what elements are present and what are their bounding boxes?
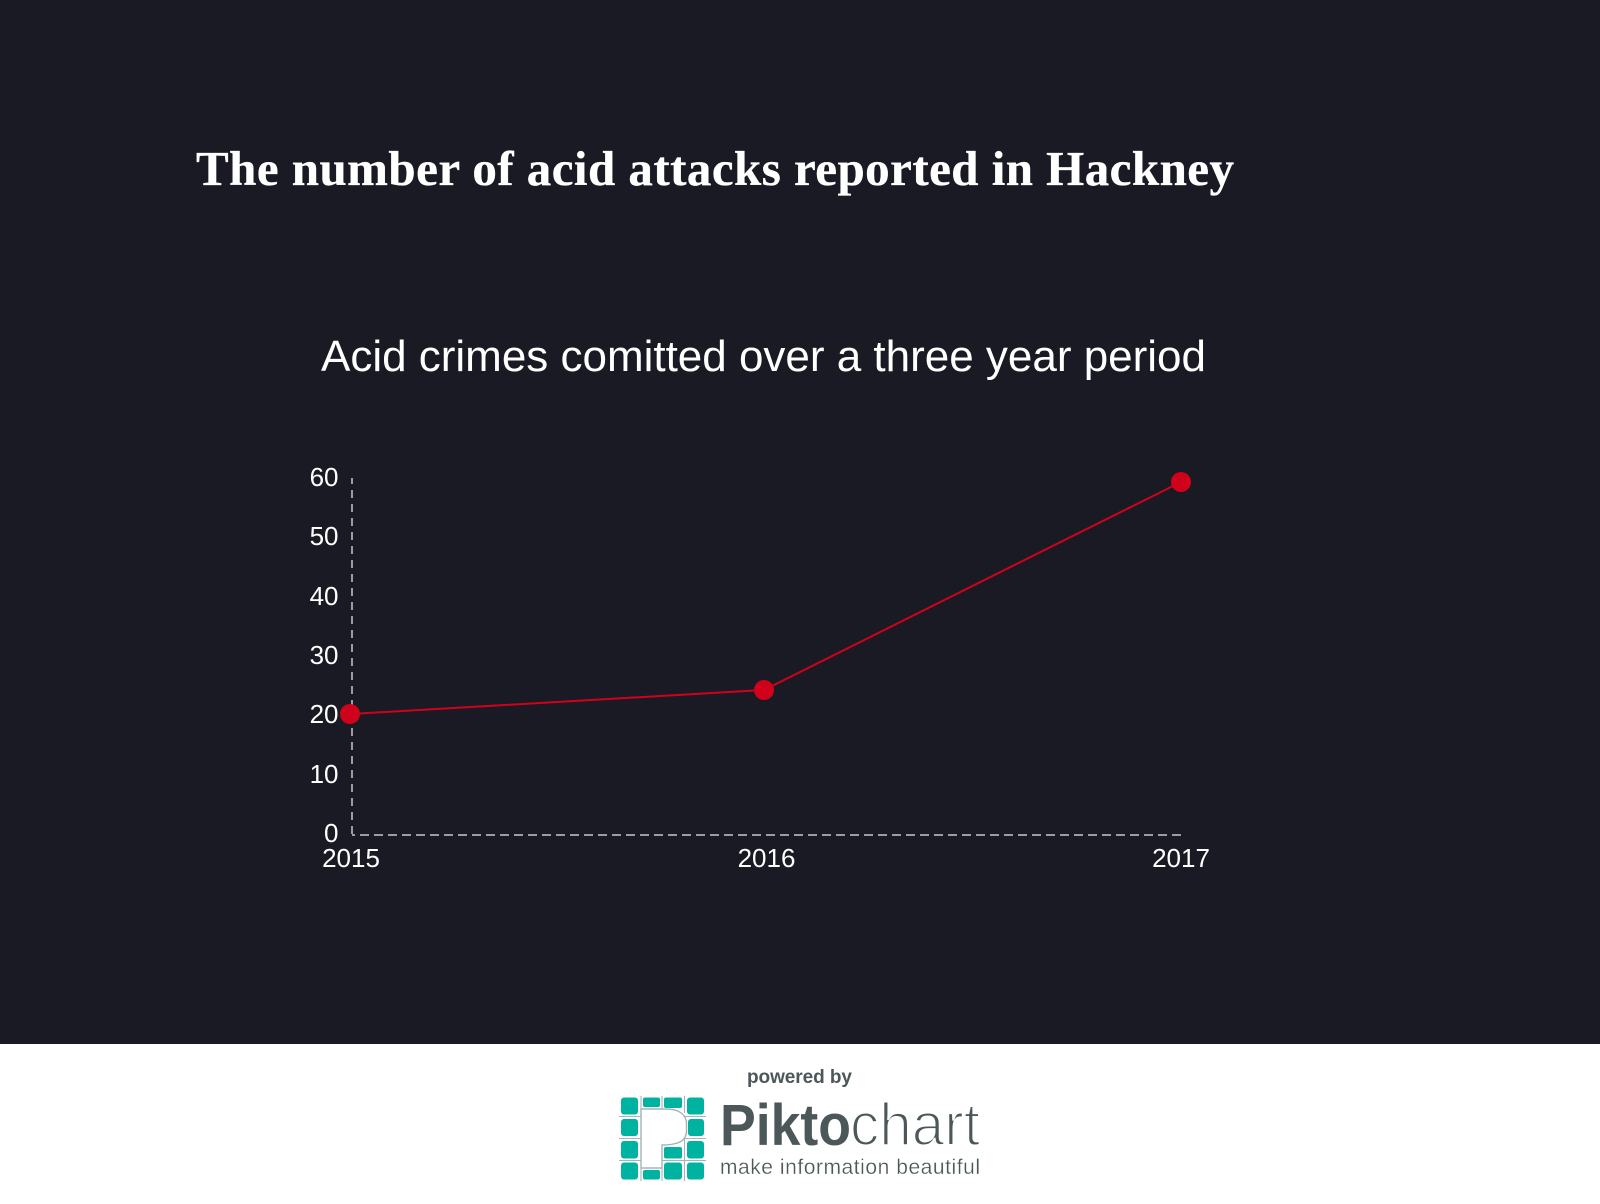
footer: Piktochart branding	[619, 1067, 980, 1181]
x axis labels: 2017	[1152, 843, 1210, 873]
y axis labels: 20	[310, 699, 338, 729]
data points	[340, 472, 1191, 724]
x axis labels	[322, 843, 1210, 873]
y axis labels: 50	[310, 521, 338, 551]
wordmark: chart: chart	[850, 1091, 980, 1158]
x axis labels: 2015	[322, 843, 380, 873]
y axis labels: 40	[310, 581, 338, 611]
powered by: powered by	[747, 1067, 852, 1088]
y axis labels: 30	[310, 640, 338, 670]
tagline: make information beautiful	[720, 1156, 980, 1179]
icon: Piktochart logo	[619, 1096, 706, 1181]
y axis	[351, 478, 353, 835]
y axis labels: 60	[310, 462, 338, 492]
chart heading: Acid crimes comitted over a three year period	[321, 332, 1206, 381]
y axis labels: 0	[324, 818, 338, 848]
line chart	[310, 462, 1210, 873]
y axis labels: 10	[310, 759, 338, 789]
x axis labels: 2016	[738, 843, 795, 873]
x axis	[352, 834, 1181, 836]
y axis labels	[310, 462, 338, 848]
title: The number of acid attacks reported in Hackney	[196, 141, 1234, 196]
wordmark: Pikto: Pikto	[720, 1093, 851, 1158]
data line	[350, 482, 1181, 714]
